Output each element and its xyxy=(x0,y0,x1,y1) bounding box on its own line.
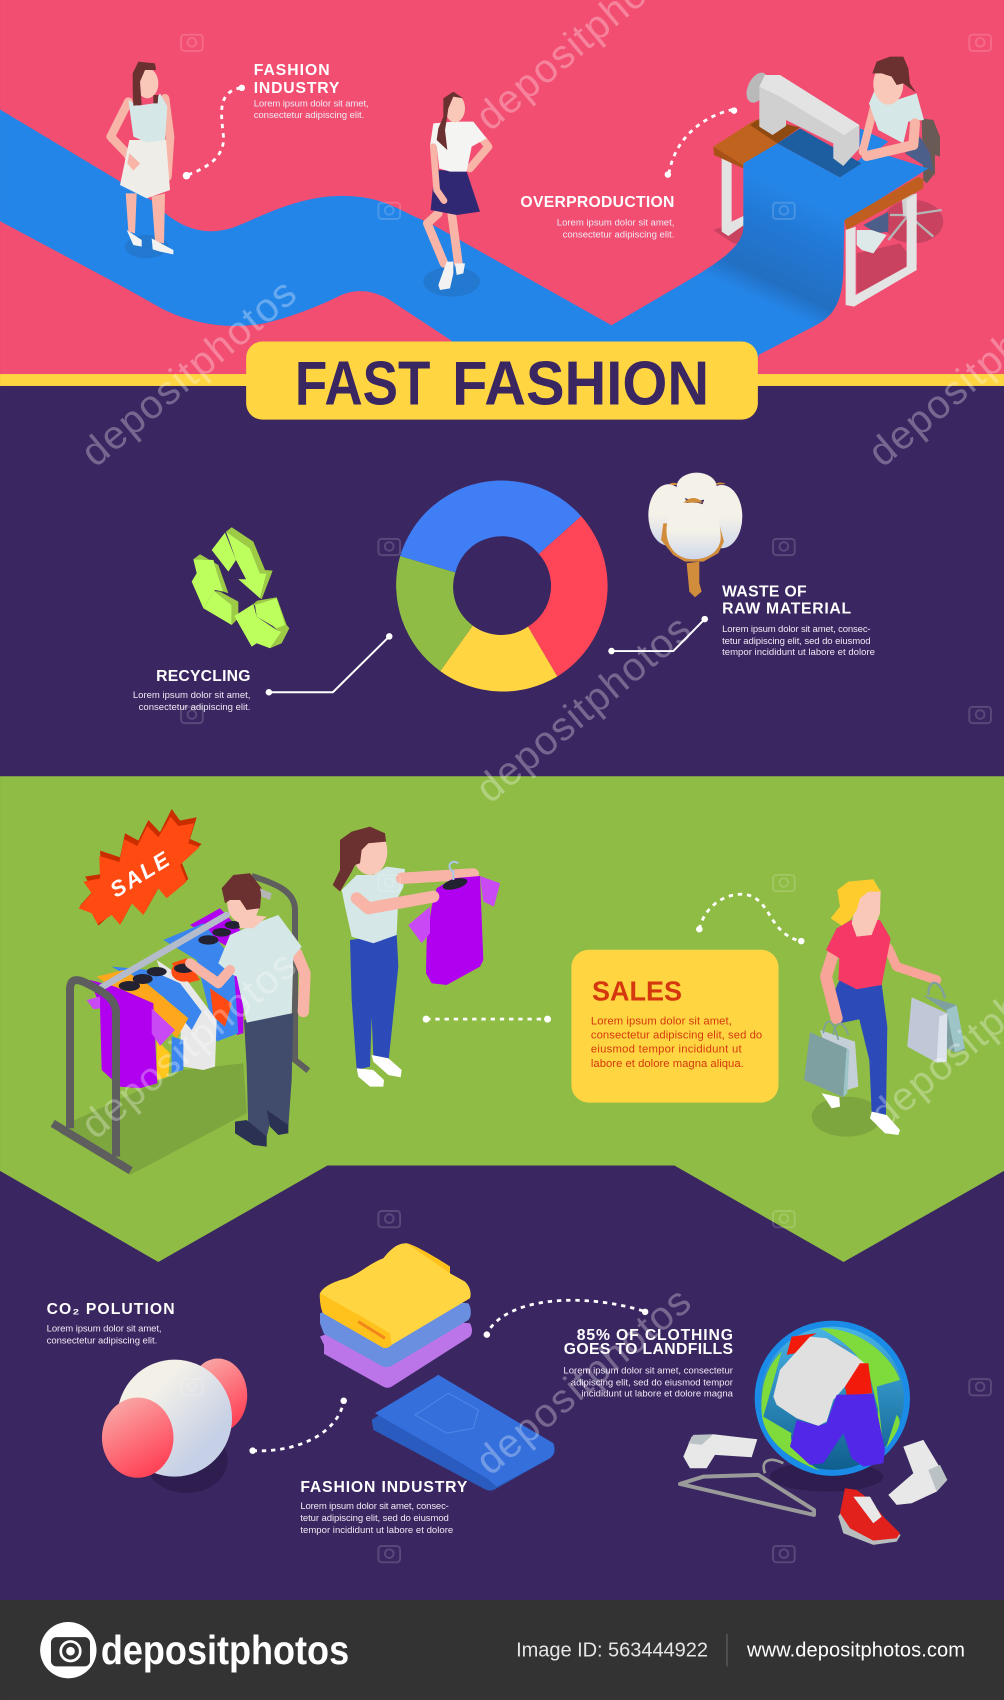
label: recycling: Lorem ipsum dolor sit amet, xyxy=(133,690,250,701)
label: fashion industry: Lorem ipsum dolor sit amet, xyxy=(254,98,369,109)
figure: shopper with bags xyxy=(804,879,965,1137)
label: co2 pollution: consectetur adipiscing elit. xyxy=(47,1335,157,1346)
label: waste of raw material: Lorem ipsum dolor sit amet, consec- xyxy=(722,624,871,635)
figure: woman in navy skirt xyxy=(423,92,488,297)
icon: stacked folded clothes xyxy=(320,1243,472,1388)
panel: sales box: consectetur adipiscing elit, sed do xyxy=(591,1030,762,1042)
label: landfills: 85% OF CLOTHING xyxy=(577,1327,733,1344)
panel: sales box: labore et dolore magna aliqua. xyxy=(591,1058,744,1070)
icon: hanger xyxy=(680,1460,814,1515)
background: purple band xyxy=(0,386,1004,777)
blue fabric ribbon xyxy=(0,110,759,374)
icon: co2 molecule xyxy=(102,1358,247,1493)
label: co2 pollution: Lorem ipsum dolor sit amet, xyxy=(47,1323,162,1334)
connector: recycling xyxy=(266,633,392,696)
icon: sock left xyxy=(683,1434,757,1468)
label: waste of raw material: RAW MATERIAL xyxy=(722,601,851,618)
label: recycling: consectetur adipiscing elit. xyxy=(139,702,250,713)
watermark texts: depositphotos xyxy=(73,943,305,1147)
label: fashion industry lower: Lorem ipsum dolor sit amet, consec- xyxy=(300,1501,449,1512)
label: landfills xyxy=(563,1327,734,1399)
label: overproduction xyxy=(520,194,674,240)
icon: recycling arrows xyxy=(192,527,289,648)
label: fashion industry lower: tetur adipiscing elit, sed do eiusmod xyxy=(300,1513,449,1524)
title banner: FAST xyxy=(295,349,431,418)
panel: sales box xyxy=(571,950,778,1103)
title banner xyxy=(246,342,758,420)
footer image id: Image ID: 563444922 xyxy=(516,1640,708,1662)
icon: sock right xyxy=(888,1440,947,1505)
label: recycling xyxy=(133,668,250,713)
dotted arrow: clothes to landfills xyxy=(484,1300,648,1338)
icon: globe with clothes xyxy=(755,1321,910,1492)
sale burst badge: SALE xyxy=(105,846,175,903)
clothes rack xyxy=(53,876,308,1175)
panel: sales box: eiusmod tempor incididunt ut xyxy=(591,1044,742,1056)
footer bar xyxy=(0,1600,1004,1700)
watermark texts: depositphotos xyxy=(468,607,699,811)
label: fashion industry: INDUSTRY xyxy=(254,80,340,97)
label: landfills: GOES TO LANDFILLS xyxy=(564,1341,733,1358)
icon: red sneaker xyxy=(838,1488,901,1545)
donut chart xyxy=(396,481,608,692)
yellow strip xyxy=(0,374,1004,386)
footer logo wordmark: depositphotos xyxy=(101,1627,349,1673)
label: waste of raw material: WASTE OF xyxy=(722,583,807,600)
figure: woman in white dress xyxy=(111,62,173,258)
label: waste of raw material xyxy=(722,583,875,658)
dotted arrow: sales to shopper xyxy=(696,894,804,944)
connector: waste of raw material xyxy=(608,616,708,654)
watermark texts: depositphotos xyxy=(73,271,305,475)
label: waste of raw material: tetur adipiscing elit, sed do eiusmod xyxy=(722,636,871,647)
footer logo icon xyxy=(40,1622,97,1678)
footer divider xyxy=(726,1634,728,1666)
dotted arrow: overproduction xyxy=(665,107,737,178)
label: landfills: incididunt ut labore et dolore magna xyxy=(581,1388,734,1399)
sale burst badge xyxy=(78,809,202,926)
figure: woman holding purple shirt xyxy=(333,827,500,1087)
panel: sales box: SALES xyxy=(592,975,682,1007)
footer url: www.depositphotos.com xyxy=(746,1640,965,1662)
icon: folded jeans xyxy=(372,1375,555,1491)
dotted arrow: molecule to fashion industry xyxy=(249,1398,347,1454)
label: overproduction: OVERPRODUCTION xyxy=(520,194,674,211)
watermark texts: depositphotos xyxy=(468,1279,699,1484)
label: co2 pollution xyxy=(47,1301,175,1346)
title banner: FASHION xyxy=(452,349,709,418)
background: green chevron band xyxy=(0,776,1004,1262)
icon: cotton boll xyxy=(648,473,742,597)
label: fashion industry xyxy=(254,62,369,121)
watermark camera marks xyxy=(181,35,991,1562)
figure: man xyxy=(190,873,305,1147)
label: fashion industry: FASHION xyxy=(254,62,330,79)
label: fashion industry lower: FASHION INDUSTRY xyxy=(300,1479,468,1496)
background: pink band xyxy=(0,0,1004,375)
label: fashion industry lower xyxy=(300,1479,468,1536)
label: landfills: adipiscing elit, sed do eiusmod tempor xyxy=(571,1378,734,1389)
icons: folded clothes xyxy=(320,1243,555,1491)
label: waste of raw material: tempor incididunt ut labore et dolore xyxy=(722,647,875,658)
label: overproduction: consectetur adipiscing elit. xyxy=(563,229,674,240)
label: fashion industry lower: tempor incididunt ut labore et dolore xyxy=(300,1525,453,1536)
figure: sewing table with seamstress xyxy=(683,57,943,355)
panel: sales box: Lorem ipsum dolor sit amet, xyxy=(591,1016,732,1028)
dotted arrow: fashion industry xyxy=(183,85,245,179)
label: fashion industry: consectetur adipiscing elit. xyxy=(254,110,364,121)
label: overproduction: Lorem ipsum dolor sit amet, xyxy=(557,218,674,229)
label: co2 pollution: CO₂ POLUTION xyxy=(47,1301,175,1318)
label: landfills: Lorem ipsum dolor sit amet, consectetur xyxy=(563,1366,734,1377)
scene: clothes rack and shoppers xyxy=(53,809,500,1175)
landfill illustration xyxy=(680,1321,947,1545)
label: recycling: RECYCLING xyxy=(156,668,250,685)
background: lower purple band xyxy=(0,1160,1004,1600)
dotted arrow: woman to sales box xyxy=(423,1016,551,1023)
figures: woman in white dress and woman in navy skirt xyxy=(111,62,488,297)
